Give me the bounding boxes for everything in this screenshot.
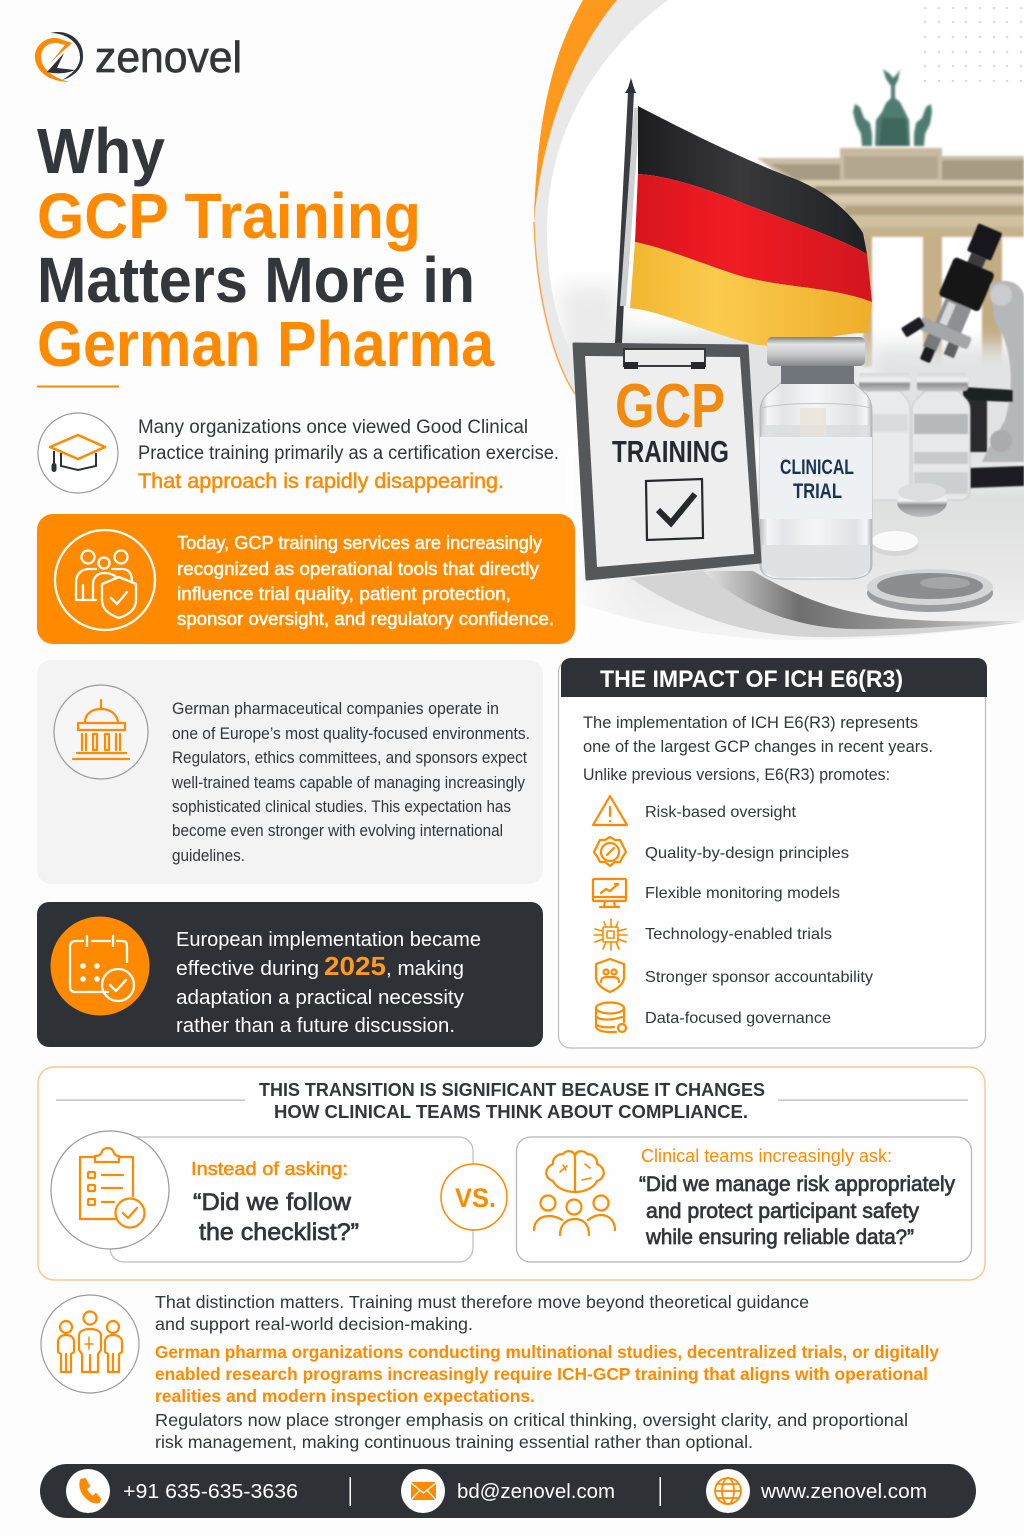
contact: email: bd@zenovel.com [457,1481,615,1503]
panel: compliance mindset transition [38,1067,985,1280]
microscope [893,211,1024,488]
icon: database [596,1002,626,1032]
item: risk-based oversight: Risk-based oversight [645,804,797,821]
clinical trial vial [760,337,872,579]
right card: clinical teams ask: Clinical teams increasingly ask: [641,1146,892,1166]
contact footer bar [40,1464,976,1518]
intro text [138,417,559,493]
orange statement text: recognized as operational tools that directly [177,559,539,579]
title [37,115,494,388]
panel: orange statement [37,514,575,644]
closing text: German pharma organizations conducting multinational studies, decentralized trials, or digitally [155,1342,939,1362]
text: implementation [176,929,481,1037]
icon: warning triangle [593,796,627,825]
decorative orange and grey swoosh [534,0,1024,440]
heading: this transition: THIS TRANSITION IS SIGNIFICANT BECAUSE IT CHANGES [259,1079,765,1100]
item: sponsor accountability: Stronger sponsor accountability [645,969,873,986]
text: implementation: , making [386,958,464,980]
Brandenburg gate [757,69,1024,377]
VS badge [441,1164,507,1230]
title: German Pharma [37,308,494,380]
closing text: and support real-world decision-making. [155,1314,473,1334]
logo: zenovel [35,32,242,82]
closing text: That distinction matters. Training must therefore move beyond theoretical guidance [155,1292,809,1312]
orange statement text [177,533,554,629]
quadriga [853,69,932,146]
text: implementation: European implementation became [176,929,481,951]
paragraph: quality environment: well-trained teams capable of managing increasingly [171,774,526,792]
paragraph: quality environment: guidelines. [172,847,245,865]
icon: calendar check [50,916,150,1016]
paragraph: quality environment: German pharmaceutical companies operate in [172,700,499,718]
item: technology trials: Technology-enabled trials [645,926,832,943]
icon: processor chip [594,919,627,950]
logo mark [35,32,83,82]
intro text: Many organizations once viewed Good Clinical [138,417,528,438]
icon: shield people [596,959,624,992]
back vials [859,373,970,500]
impact intro text [583,714,933,784]
icon: checklist [51,1131,169,1249]
blurred background city [560,285,1024,475]
text: implementation: rather than a future discussion. [176,1015,455,1037]
intro block [38,413,559,493]
title: Matters More in [37,244,475,316]
heading: this transition: HOW CLINICAL TEAMS THINK ABOUT COMPLIANCE. [274,1101,748,1122]
paragraph: quality environment: Regulators, ethics committees, and sponsors expect [172,749,527,767]
panel: German quality environment [37,660,543,884]
impact intro text: The implementation of ICH E6(R3) represents [583,714,918,732]
item: quality-by-design: Quality-by-design principles [645,845,849,862]
closing text: risk management, making continuous training essential rather than optional. [155,1432,753,1452]
paragraph: quality environment [171,700,530,865]
item: data governance: Data-focused governance [645,1010,831,1027]
intro text: That approach is rapidly disappearing. [138,470,504,493]
icon: graduation cap [38,413,118,493]
German flag [630,106,872,346]
logo wordmark: zenovel [95,33,242,82]
decorative dot grid [924,7,1022,82]
icon: email [401,1469,445,1513]
icon: phone [66,1469,110,1513]
right card: clinical teams ask [516,1137,972,1262]
text: implementation: effective during [176,958,319,980]
heading: this transition [56,1079,968,1122]
icon: globe [706,1469,750,1513]
right card: clinical teams ask: and protect participant safety [646,1200,919,1223]
contact: website: www.zenovel.com [760,1481,927,1503]
closing text: enabled research programs increasingly require ICH-GCP training that aligns with operational [155,1364,928,1384]
left card: instead of asking: “Did we follow [193,1189,352,1216]
paragraph: quality environment: become even stronger with evolving international [172,822,503,840]
contact: phone number: +91 635-635-3636 [123,1481,298,1503]
clipboard: GCP training: GCP [615,372,725,441]
impact intro text: Unlike previous versions, E6(R3) promotes: [583,766,890,784]
impact header: THE IMPACT OF ICH E6(R3) [600,666,903,693]
icon: team with shield [55,530,155,630]
text: implementation: adaptation a practical necessity [176,987,464,1009]
icon: brain and team [534,1151,615,1235]
right card: clinical teams ask: “Did we manage risk appropriately [639,1173,955,1196]
intro text: Practice training primarily as a certification exercise. [138,443,559,464]
icon: government building [54,685,148,779]
flag pole [615,78,640,343]
paragraph: quality environment: sophisticated clinical studies. This expectation has [172,798,511,816]
clinical trial vial: CLINICAL [780,456,854,479]
left card: instead of asking: Instead of asking: [191,1159,348,1179]
orange statement text: sponsor oversight, and regulatory confidence. [177,609,554,629]
title: GCP Training [37,180,421,252]
icon: quality badge [594,837,626,866]
left card: instead of asking: the checklist?” [199,1219,359,1246]
closing text: realities and modern inspection expectations. [155,1386,535,1406]
table with dark swoosh [565,450,1024,640]
icon: team of three [41,1295,139,1393]
item: flexible monitoring: Flexible monitoring models [645,885,840,902]
left card: instead of asking [51,1131,473,1262]
metal cap, pill and lid [867,483,993,612]
text: implementation: 2025 [324,951,386,981]
impact header [561,658,987,697]
hero illustration: flag, gate, clipboard and vials [534,0,1024,640]
right card: clinical teams ask: while ensuring reliable data?” [645,1226,914,1249]
closing text: Regulators now place stronger emphasis on critical thinking, oversight clarity, and proportional [155,1410,908,1430]
impact intro text: one of the largest GCP changes in recent years. [583,738,933,756]
orange statement text: Today, GCP training services are increasingly [177,533,542,553]
paragraph: quality environment: one of Europe’s most quality-focused environments. [172,725,530,743]
VS badge: VS. [455,1183,496,1213]
closing section [41,1292,939,1452]
clipboard: GCP training: TRAINING [612,434,729,469]
orange statement text: influence trial quality, patient protection, [177,584,511,604]
icon: monitor chart [593,879,626,907]
clipboard: GCP training [574,344,760,579]
panel: the impact of ICH E6(R3) [558,658,987,1048]
clinical trial vial: TRIAL [793,480,842,503]
closing text [155,1292,939,1452]
panel: 2025 implementation [37,902,543,1047]
title: Why [37,115,165,187]
